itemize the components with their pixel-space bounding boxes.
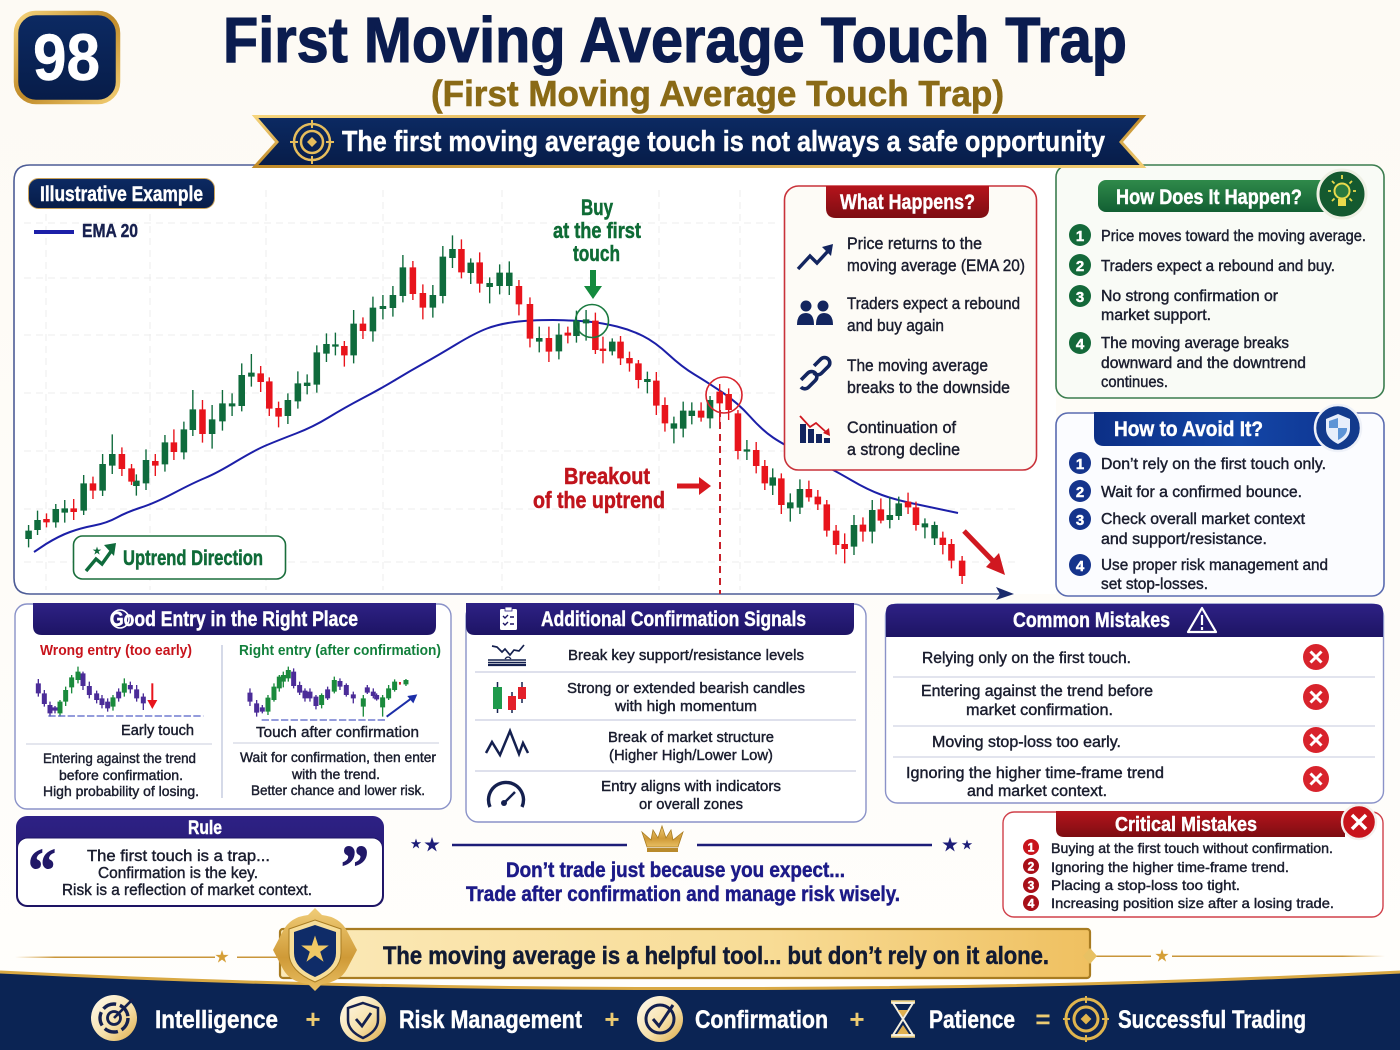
column: wrong entry: Entering against the trend <box>43 750 196 766</box>
critical item 2: Ignoring the higher time-frame trend. <box>1051 859 1289 875</box>
list item 4 <box>1069 554 1328 593</box>
chart grid <box>24 190 1020 590</box>
label: successful trading: Successful Trading <box>1118 1006 1306 1034</box>
icon: light bulb <box>1318 170 1366 218</box>
panel: critical mistakes <box>1003 805 1383 917</box>
list item 1: Don’t rely on the first touch only. <box>1101 456 1326 473</box>
text: moving average breaks <box>847 356 1010 397</box>
column: wrong entry: before confirmation. <box>59 767 183 783</box>
callout: breakout of the uptrend: of the uptrend <box>533 487 665 513</box>
EMA 20 line <box>34 320 958 552</box>
list item 4: Use proper risk management and <box>1101 557 1328 574</box>
label: intelligence: Intelligence <box>155 1006 278 1034</box>
signal row: support and resistance: Break key support/resistance levels <box>568 647 804 664</box>
banner: first touch warning <box>255 116 1143 166</box>
text: moving average breaks: breaks to the downside <box>847 378 1010 397</box>
signal row: indicators <box>488 778 781 813</box>
list item 4: 4 <box>1076 558 1085 575</box>
callout: buy at the first touch <box>553 195 642 299</box>
icon: critical x <box>1342 805 1376 839</box>
footer formula <box>91 995 1306 1042</box>
callout: breakout of the uptrend: Breakout <box>564 463 650 489</box>
legend: EMA 20: EMA 20 <box>82 221 138 241</box>
list item 3: 3 <box>1076 289 1084 306</box>
candlesticks: uptrend <box>29 235 519 547</box>
text: rule statement <box>62 848 312 899</box>
mistake row 4 <box>906 765 1329 800</box>
list item 3: 3 <box>1076 512 1084 529</box>
side ornament left <box>15 950 277 963</box>
label: illustrative example: Illustrative Example <box>40 183 203 206</box>
label: uptrend direction: Uptrend Direction <box>123 547 263 570</box>
mistake row 4: Ignoring the higher time-frame trend <box>906 765 1164 782</box>
label: patience: Patience <box>929 1006 1015 1034</box>
heading: additional confirmation: Additional Confirmation Signals <box>541 608 806 631</box>
list item 3 <box>1069 285 1278 324</box>
signal row: bearish candles: Strong or extended bearish candles <box>567 680 805 697</box>
axis arrow <box>996 587 1014 600</box>
column: right entry: Touch after confirmation <box>256 724 419 741</box>
heading: good entry: Good Entry in the Right Place <box>110 608 358 631</box>
callout: buy at the first touch: Buy <box>581 195 614 220</box>
text: traders expect <box>847 294 1020 335</box>
mistake row 1 <box>922 644 1329 670</box>
heading: rule: Rule <box>188 818 222 839</box>
list item 2: 2 <box>1076 484 1084 501</box>
icon: intelligence <box>91 995 137 1041</box>
callout: do not trade on expectation <box>411 826 972 906</box>
icon: broken chain <box>797 355 832 391</box>
heading: how to avoid it: How to Avoid It? <box>1114 418 1263 441</box>
mistake row 4: and market context. <box>967 783 1107 800</box>
first touch circle <box>576 304 608 338</box>
critical item 3: Placing a stop-loss too tight. <box>1051 877 1240 893</box>
list item 2 <box>1069 254 1335 276</box>
heading: how does it happen: How Does It Happen? <box>1116 186 1302 209</box>
column: wrong entry: Early touch <box>121 722 194 739</box>
critical item 3: 3 <box>1028 878 1035 892</box>
heading: good entry <box>33 603 436 635</box>
side ornament right <box>1095 949 1385 962</box>
list item 3 <box>1069 508 1306 548</box>
icon: confirmation <box>637 996 683 1042</box>
callout: buy at the first touch: at the first <box>553 218 642 243</box>
mistake row 3: Moving stop-loss too early. <box>932 734 1121 751</box>
signal row: market structure: (Higher High/Lower Low) <box>609 747 773 764</box>
column: right entry: with the trend. <box>291 766 380 782</box>
title: First Moving Average Touch Trap <box>223 4 1127 76</box>
heading: critical mistakes <box>1056 811 1345 837</box>
equals sign: = <box>1035 1004 1051 1034</box>
badge: number 98: 98 <box>33 20 100 94</box>
icon: rising line <box>798 244 833 269</box>
critical item 1: Buying at the first touch without confirmation. <box>1051 840 1333 856</box>
callout: do not trade on expectation: Trade after confirmation and manage risk wisely. <box>466 883 900 906</box>
critical item 2: 2 <box>1028 860 1035 874</box>
mistake row 2: Entering against the trend before <box>921 683 1153 700</box>
callout: buy at the first touch: touch <box>573 241 620 266</box>
plus 1: + <box>305 1004 321 1034</box>
callout: do not trade on expectation: Don’t trade just because you expect... <box>506 859 845 882</box>
quote mark: closing: ” <box>341 834 369 902</box>
banner: moving average reminder: The moving average is a helpful tool... but don’t rely on it alone. <box>383 942 1049 970</box>
list item 4 <box>1069 332 1306 391</box>
panel: how to avoid it <box>1056 405 1384 596</box>
heading: additional confirmation <box>466 603 854 635</box>
heading: how to avoid it <box>1094 412 1335 446</box>
heading: what happens <box>826 186 989 218</box>
heading: what happens: What Happens? <box>840 191 975 214</box>
heading: common mistakes: Common Mistakes <box>1013 609 1170 632</box>
signal row: indicators: Entry aligns with indicators <box>601 778 781 795</box>
critical item 1: 1 <box>1028 840 1035 854</box>
chart frame <box>14 165 1056 594</box>
plus 3: + <box>849 1004 865 1034</box>
icon: shield <box>1315 405 1361 451</box>
quote mark: opening: “ <box>28 837 56 905</box>
list item 3: Check overall market context <box>1101 511 1306 528</box>
breakout circle <box>706 377 742 413</box>
plus 2: + <box>604 1004 620 1034</box>
decorative stars and rule <box>411 837 972 851</box>
text: moving average breaks: The moving average <box>847 356 988 375</box>
label: illustrative example <box>28 178 214 208</box>
panel: common mistakes <box>886 604 1384 803</box>
icon: falling bars <box>800 416 830 443</box>
icon: target <box>290 120 334 164</box>
mistake row 2 <box>921 683 1329 719</box>
signal row: indicators: or overall zones <box>639 796 743 813</box>
list item 1: 1 <box>1076 228 1084 245</box>
label: risk management: Risk Management <box>399 1006 583 1034</box>
panel: how does it happen <box>1056 165 1384 398</box>
heading: critical mistakes: Critical Mistakes <box>1115 814 1257 836</box>
footer band <box>0 972 1400 1050</box>
banner: moving average reminder <box>15 908 1385 991</box>
icon: successful trading target <box>1063 996 1109 1042</box>
list item 4: 4 <box>1076 336 1085 353</box>
signal row: market structure: Break of market structure <box>608 729 774 746</box>
callout: breakout of the uptrend <box>533 463 711 513</box>
badge: number 98 <box>16 13 118 102</box>
list item 1: 1 <box>1076 456 1084 473</box>
signal row: market structure <box>486 729 774 764</box>
list item 1: Price moves toward the moving average. <box>1101 228 1366 245</box>
column: right entry: Wait for confirmation, then enter <box>240 749 436 765</box>
arrow: continued decline <box>964 531 1005 575</box>
list item 2: 2 <box>1076 258 1084 275</box>
text: continuation <box>847 418 960 459</box>
text: continuation: a strong decline <box>847 440 960 459</box>
list item 2 <box>1069 480 1302 502</box>
banner: first touch warning: The first moving average touch is not always a safe opportunity <box>342 126 1105 158</box>
heading: common mistakes <box>886 604 1383 637</box>
text: traders expect: and buy again <box>847 316 944 335</box>
list item 3: and support/resistance. <box>1101 531 1267 548</box>
icon: hourglass <box>891 1002 915 1036</box>
label: uptrend direction <box>74 536 286 579</box>
list item 4: set stop-losses. <box>1101 576 1208 593</box>
breakout dashed line <box>719 410 721 594</box>
column: right entry: Right entry (after confirmation) <box>239 642 441 659</box>
column: right entry: Better chance and lower risk. <box>251 782 425 798</box>
text: rule statement: Risk is a reflection of market context. <box>62 882 312 899</box>
list item 2: Traders expect a rebound and buy. <box>1101 258 1335 275</box>
text: rule statement: Confirmation is the key. <box>98 865 258 882</box>
list item 4: continues. <box>1101 374 1168 391</box>
list item 3: No strong confirmation or <box>1101 288 1278 305</box>
column: wrong entry <box>26 642 212 799</box>
signal row: bearish candles: with high momentum <box>614 698 757 715</box>
column: wrong entry: High probability of losing. <box>43 783 199 799</box>
text: continuation: Continuation of <box>847 418 956 437</box>
text: price returns <box>847 234 1025 275</box>
list item 4: The moving average breaks <box>1101 335 1289 352</box>
legend: EMA 20 <box>34 221 138 241</box>
panel: what happens <box>784 186 1036 470</box>
text: traders expect: Traders expect a rebound <box>847 294 1020 313</box>
mistake row 1: Relying only on the first touch. <box>922 650 1131 667</box>
mistake row 3 <box>932 727 1329 753</box>
text: price returns: moving average (EMA 20) <box>847 256 1025 275</box>
icon: risk management <box>340 996 386 1042</box>
critical item 4: Increasing position size after a losing trade. <box>1051 895 1334 911</box>
list item 1 <box>1069 224 1366 246</box>
list item 4: downward and the downtrend <box>1101 355 1306 372</box>
critical item 4: 4 <box>1028 896 1035 910</box>
signal row: bearish candles <box>493 680 805 715</box>
chart area <box>14 165 1056 594</box>
icon: shield star badge <box>273 908 357 991</box>
signal row: support and resistance <box>488 645 804 665</box>
text: price returns: Price returns to the <box>847 234 982 253</box>
candlesticks: downtrend <box>530 297 962 584</box>
panel: good entry in the right place <box>15 603 451 809</box>
icon: crown <box>642 826 683 852</box>
label: confirmation: Confirmation <box>695 1006 828 1034</box>
text: rule statement: The first touch is a trap... <box>87 848 270 865</box>
column: wrong entry: Wrong entry (too early) <box>40 642 192 659</box>
icon: traders <box>797 300 833 325</box>
column: right entry <box>233 642 441 798</box>
mini chart: wrong entry <box>38 667 203 717</box>
panel: additional confirmation signals <box>466 603 866 822</box>
mistake row 2: market confirmation. <box>966 702 1113 719</box>
list item 3: market support. <box>1101 307 1211 324</box>
list item 2: Wait for a confirmed bounce. <box>1101 484 1302 501</box>
mini chart: right entry <box>250 667 417 720</box>
panel: rule <box>16 816 384 907</box>
subtitle: (First Moving Average Touch Trap) <box>431 73 1004 114</box>
panel: illustrative example chart <box>14 165 1056 600</box>
heading: how does it happen <box>1098 180 1340 212</box>
list item 1 <box>1069 452 1326 474</box>
